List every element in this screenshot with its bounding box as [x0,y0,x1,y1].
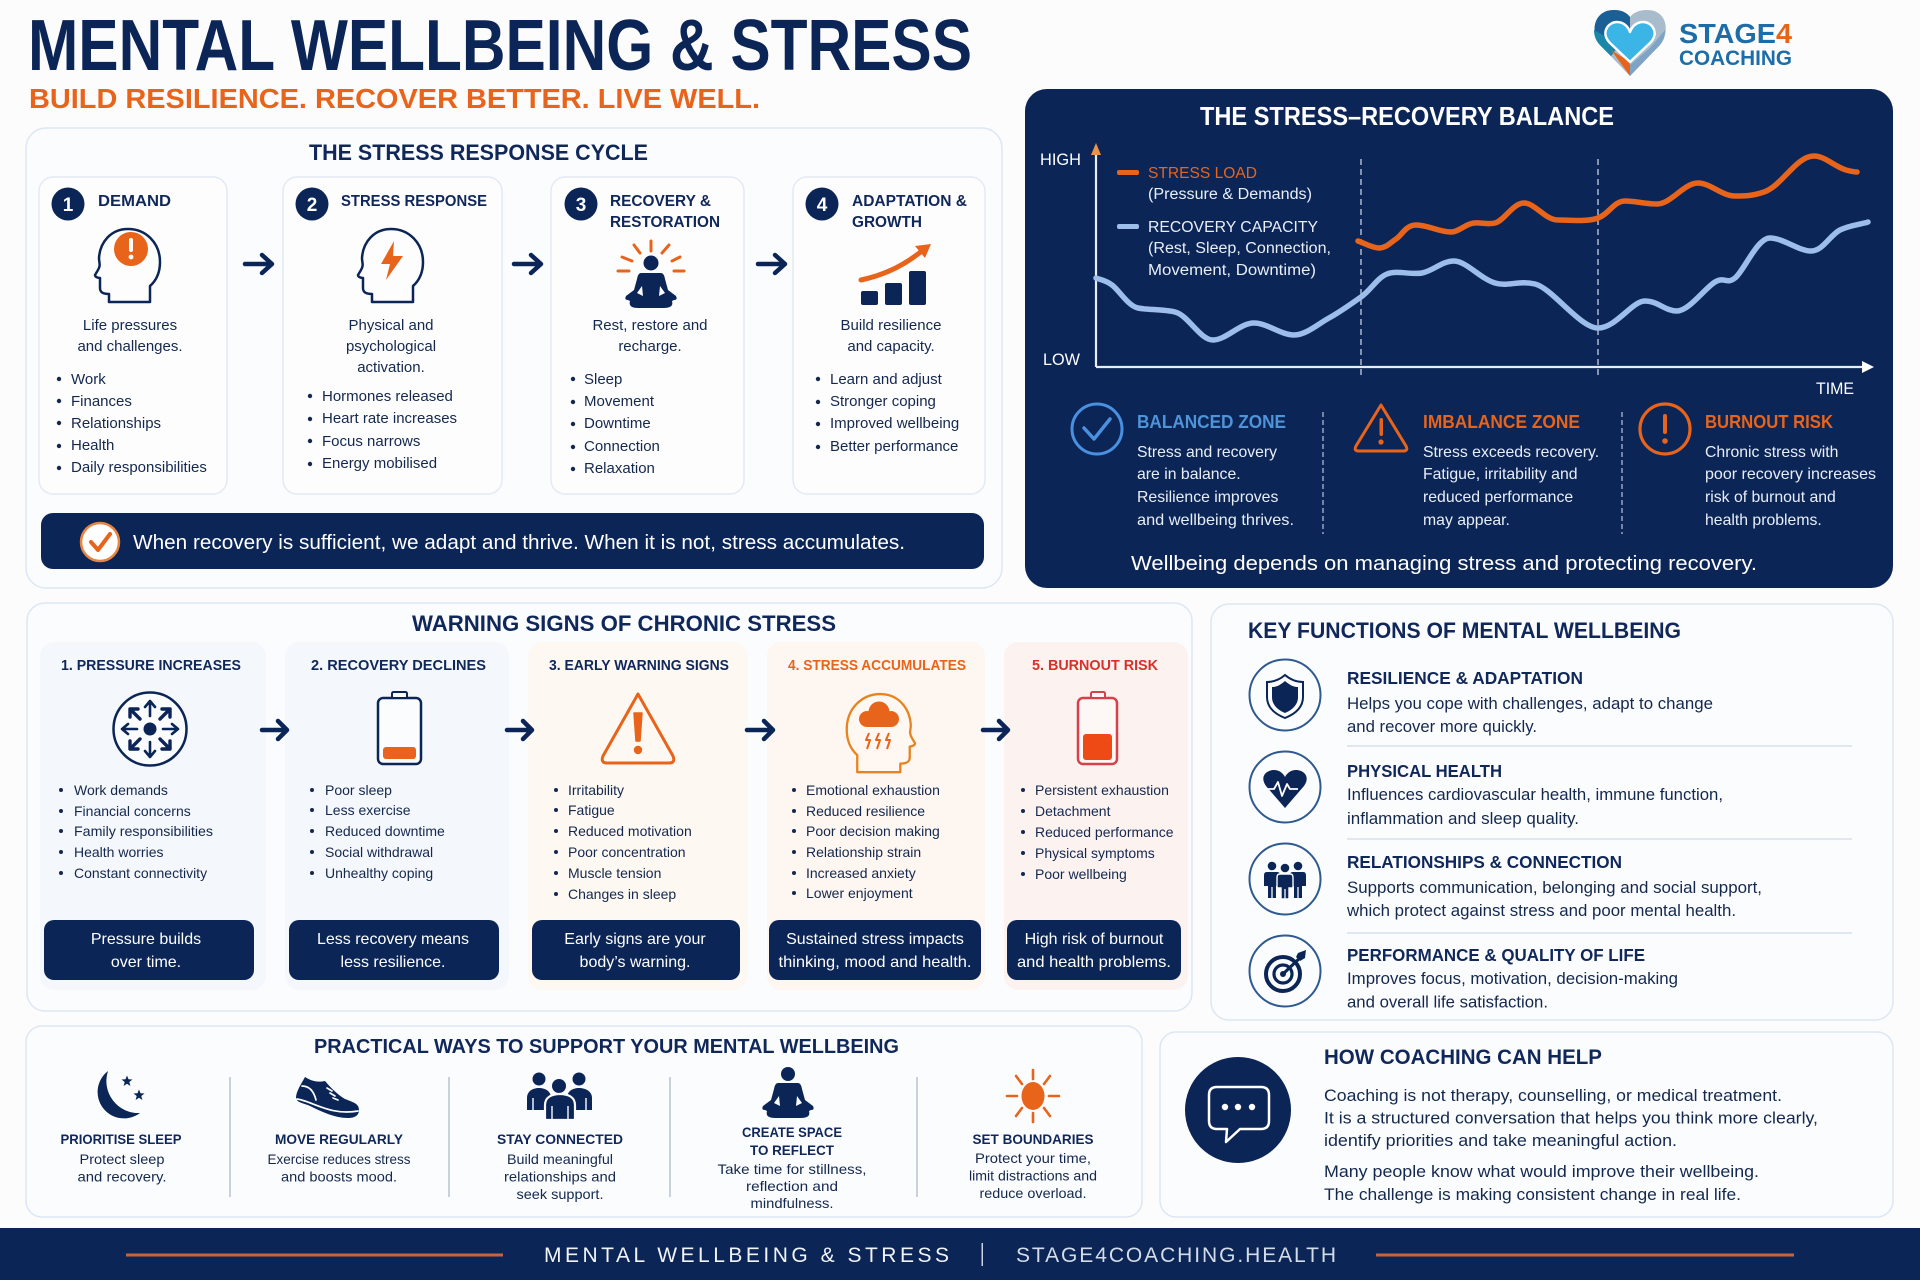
footer bar [0,1228,1920,1280]
card: burnout risk: Persistent exhaustion [1035,782,1169,798]
card: adaptation and growth: ADAPTATION & [852,193,967,210]
card: stress response: psychological [346,338,436,355]
arrow [514,255,541,273]
icon: rising bars and arrow [861,244,931,305]
card: demand: Work [71,371,106,388]
legend [1117,165,1331,279]
tip: set boundaries: SET BOUNDARIES [972,1131,1094,1147]
card: recovery declines: Less exercise [325,802,411,818]
card: pressure increases: Work demands [74,782,168,798]
card: stress accumulates: thinking, mood and health. [778,954,972,971]
zone: balanced: Stress and recovery [1137,444,1277,461]
zone: imbalance: IMBALANCE ZONE [1423,412,1580,432]
line chart: stress load and recovery capacity [1040,143,1874,398]
card: burnout risk: Physical symptoms [1035,845,1155,861]
line chart: stress load and recovery capacity: HIGH [1040,151,1081,169]
card: pressure increases: over time. [111,954,181,971]
card: early warning signs: Changes in sleep [568,886,676,902]
subtitle: BUILD RESILIENCE. RECOVER BETTER. LIVE WELL. [29,83,760,114]
card: early warning signs: 3. EARLY WARNING SIGNS [549,657,729,674]
card: recovery and restoration: Movement [584,393,655,410]
heading: key functions: KEY FUNCTIONS OF MENTAL WELLBEING [1248,618,1681,643]
card: recovery and restoration: 3 [576,195,586,216]
text block: coaching description: It is a structured conversation that helps you think more clearly, [1324,1108,1818,1128]
arrow [758,255,785,273]
card: adaptation and growth: and capacity. [847,338,935,355]
function: relationships and connection: RELATIONSHIPS & CONNECTION [1347,852,1622,872]
card: recovery declines: Reduced downtime [325,823,445,839]
line chart: stress load and recovery capacity: TIME [1816,380,1854,398]
tip: stay connected: Build meaningful [507,1151,613,1167]
icon: head with lightning bolt [358,229,423,302]
zone: burnout risk: risk of burnout and [1705,489,1836,506]
function: relationships and connection: which protect against stress and poor mental health. [1346,902,1736,920]
card: recovery and restoration: recharge. [618,338,682,355]
logo: Stage4 Coaching: STAGE4 [1679,18,1792,49]
heading: stress recovery balance: THE STRESS–RECOVERY BALANCE [1200,101,1614,131]
card: adaptation and growth: Stronger coping [830,393,936,410]
tip: stay connected: seek support. [516,1186,604,1202]
line chart: stress load and recovery capacity: LOW [1043,351,1080,369]
card: adaptation and growth: GROWTH [852,214,922,231]
icon: head with exclamation [95,229,160,302]
tip: prioritise sleep [60,1071,182,1184]
zone: balanced [1072,404,1294,529]
panel: how coaching can help [1160,1032,1893,1217]
function: performance and quality of life: Improves focus, motivation, decision-making [1347,970,1678,988]
zone: burnout risk: BURNOUT RISK [1705,412,1833,432]
title: MENTAL WELLBEING & STRESS [28,6,972,86]
card: recovery and restoration: Relaxation [584,460,655,477]
function: physical health: inflammation and sleep quality. [1347,810,1579,828]
card: demand: Finances [71,393,132,410]
card: stress accumulates: Lower enjoyment [806,885,913,901]
zone: balanced: BALANCED ZONE [1137,412,1286,432]
card: recovery and restoration: RESTORATION [610,214,720,231]
tip: set boundaries: Protect your time, [975,1150,1091,1166]
icon: pressure from all directions [114,692,186,766]
card: pressure increases: Family responsibilities [74,823,213,839]
card: adaptation and growth: Learn and adjust [830,371,943,388]
card: recovery and restoration: Sleep [584,371,622,388]
tip: set boundaries [969,1070,1097,1201]
icon: low battery [378,692,421,764]
arrow [262,721,287,739]
card: demand: Health [71,437,114,454]
card: burnout risk: Reduced performance [1035,824,1174,840]
card: recovery declines: Less recovery means [317,931,469,948]
card: stress accumulates [767,642,985,990]
text block: coaching description: Many people know what would improve their wellbeing. [1324,1162,1759,1181]
zone: burnout risk [1640,404,1876,529]
card: pressure increases: 1. PRESSURE INCREASES [61,657,241,674]
arrow [245,255,272,273]
panel: the stress response cycle [26,128,1002,588]
card: stress accumulates: Sustained stress impacts [786,931,964,948]
card: demand: Daily responsibilities [71,459,207,476]
card: recovery and restoration [551,177,744,494]
card: early warning signs: Irritability [568,782,624,798]
card: demand: Relationships [71,415,161,432]
card: pressure increases: Constant connectivity [74,865,207,881]
function: resilience and adaptation [1250,660,1713,736]
card: early warning signs: Fatigue [568,802,615,818]
card: early warning signs: Poor concentration [568,844,686,860]
callout: recovery message bar: When recovery is sufficient, we adapt and thrive. When it is not, stress accumulates. [133,532,905,554]
function: performance and quality of life: and overall life satisfaction. [1347,994,1548,1012]
card: stress accumulates: 4. STRESS ACCUMULATES [788,657,966,674]
tip: stay connected: STAY CONNECTED [497,1131,623,1147]
card: stress response: Energy mobilised [322,455,437,472]
function: relationships and connection: Supports communication, belonging and social support, [1347,879,1762,897]
function: physical health [1250,752,1723,828]
card: adaptation and growth: Better performance [830,438,958,455]
legend: RECOVERY CAPACITY [1148,219,1318,236]
footer bar: MENTAL WELLBEING & STRESS [544,1244,949,1267]
zone: imbalance: reduced performance [1423,489,1573,506]
card: burnout risk [1004,642,1188,990]
card: recovery declines: Poor sleep [325,782,392,798]
zone: balanced: are in balance. [1137,466,1241,483]
card: demand: 1 [63,195,74,216]
icon: warning triangle [602,694,674,763]
tip: set boundaries: limit distractions and [969,1168,1097,1184]
card: stress response: activation. [357,359,425,376]
card: pressure increases: Financial concerns [74,803,191,819]
card: demand: and challenges. [77,338,183,355]
legend: (Rest, Sleep, Connection, [1148,240,1331,257]
footer bar: STAGE4COACHING.HEALTH [1016,1244,1336,1267]
card: recovery and restoration: Rest, restore and [592,317,708,334]
card: adaptation and growth [793,177,985,494]
icon: draining red battery [1078,692,1117,764]
text block: coaching description: The challenge is making consistent change in real life. [1324,1185,1741,1204]
text block: coaching description: identify priorities and take meaningful action. [1324,1131,1677,1150]
card: early warning signs: body’s warning. [580,954,690,971]
tip: create space to reflect: mindfulness. [750,1195,834,1211]
card: pressure increases [40,642,266,990]
tip: prioritise sleep: and recovery. [78,1168,166,1184]
function: physical health: Influences cardiovascular health, immune function, [1347,786,1723,804]
card: adaptation and growth: Build resilience [841,317,941,334]
heading: stress response cycle: THE STRESS RESPONSE CYCLE [309,140,648,165]
card: stress response: Physical and [348,317,434,334]
card: recovery and restoration: Downtime [584,415,651,432]
card: recovery declines [285,642,509,990]
zone: burnout risk: Chronic stress with [1705,444,1838,461]
card: recovery declines: less resilience. [341,954,445,971]
zone: imbalance: Fatigue, irritability and [1423,466,1578,483]
function: relationships and connection [1250,844,1762,920]
arrow [983,721,1008,739]
tip: stay connected: relationships and [504,1168,616,1184]
card: demand: DEMAND [98,193,171,210]
panel: the stress-recovery balance [1025,89,1893,588]
panel: practical ways to support your mental wellbeing [26,1026,1142,1217]
card: stress accumulates: Reduced resilience [806,803,925,819]
heading: how coaching can help: HOW COACHING CAN HELP [1324,1046,1602,1069]
icon: meditating person with rays [618,241,684,308]
tip: prioritise sleep: Protect sleep [80,1151,165,1167]
tip: create space to reflect: reflection and [746,1178,838,1194]
panel: key functions of mental wellbeing [1211,604,1893,1020]
card: stress accumulates: Increased anxiety [806,865,916,881]
card: stress response: 2 [307,195,317,216]
function: physical health: PHYSICAL HEALTH [1347,761,1502,781]
card: stress accumulates: Relationship strain [806,844,921,860]
tip: move regularly [268,1077,410,1184]
card: burnout risk: 5. BURNOUT RISK [1032,657,1158,674]
zone: imbalance: may appear. [1423,512,1510,529]
function: performance and quality of life [1250,936,1678,1012]
function: resilience and adaptation: Helps you cope with challenges, adapt to change [1347,695,1713,713]
card: stress response: Hormones released [322,388,453,405]
card: stress response: Heart rate increases [322,410,457,427]
function: resilience and adaptation: and recover more quickly. [1347,718,1537,736]
tip: stay connected [497,1072,623,1202]
card: stress accumulates: Poor decision making [806,823,940,839]
card: recovery and restoration: Connection [584,438,660,455]
card: burnout risk: Poor wellbeing [1035,866,1127,882]
arrow [507,721,532,739]
card: pressure increases: Pressure builds [91,931,201,948]
card: recovery declines: Social withdrawal [325,844,433,860]
card: pressure increases: Health worries [74,844,163,860]
zone: balanced: Resilience improves [1137,489,1278,506]
tip: create space to reflect: Take time for stillness, [718,1161,866,1177]
card: demand: Life pressures [83,317,177,334]
tip: move regularly: Exercise reduces stress [268,1151,410,1167]
legend: STRESS LOAD [1148,165,1257,182]
card: early warning signs: Reduced motivation [568,823,692,839]
tip: move regularly: MOVE REGULARLY [275,1131,404,1147]
card: early warning signs [528,642,748,990]
tip: prioritise sleep: PRIORITISE SLEEP [60,1131,182,1147]
card: stress accumulates: Emotional exhaustion [806,782,940,798]
heading: practical ways: PRACTICAL WAYS TO SUPPORT YOUR MENTAL WELLBEING [314,1036,899,1058]
zone: burnout risk: poor recovery increases [1705,466,1876,483]
card: burnout risk: High risk of burnout [1025,931,1164,948]
card: adaptation and growth: 4 [817,195,828,216]
logo: Stage4 Coaching [1594,10,1792,76]
tip: create space to reflect: TO REFLECT [750,1142,834,1158]
zone: imbalance [1355,405,1599,529]
text block: coaching description: Coaching is not therapy, counselling, or medical treatment. [1324,1086,1782,1105]
card: early warning signs: Early signs are your [564,931,706,948]
legend: Movement, Downtime) [1148,262,1316,279]
tip: set boundaries: reduce overload. [980,1185,1086,1201]
card: demand [39,177,227,494]
zone: balanced: and wellbeing thrives. [1137,512,1294,529]
zone: burnout risk: health problems. [1705,512,1822,529]
tip: create space to reflect [718,1067,866,1211]
tip: move regularly: and boosts mood. [281,1168,397,1184]
zone: imbalance: Stress exceeds recovery. [1423,444,1599,461]
card: burnout risk: and health problems. [1017,954,1171,971]
function: performance and quality of life: PERFORMANCE & QUALITY OF LIFE [1347,945,1645,965]
card: stress response: STRESS RESPONSE [341,193,487,210]
card: stress response [283,177,502,494]
text block: coaching description [1324,1086,1818,1204]
function: resilience and adaptation: RESILIENCE & ADAPTATION [1347,668,1583,688]
panel: warning signs of chronic stress [27,603,1192,1011]
callout: recovery message bar [41,513,984,569]
card: stress response: Focus narrows [322,433,420,450]
closing statement: Wellbeing depends on managing stress and protecting recovery. [1131,552,1757,575]
card: recovery declines: Unhealthy coping [325,865,433,881]
card: recovery and restoration: RECOVERY & [610,193,711,210]
icon: head with storm cloud [847,694,915,772]
tip: create space to reflect: CREATE SPACE [742,1124,842,1140]
icon: speech bubble [1185,1057,1291,1163]
card: burnout risk: Detachment [1035,803,1111,819]
logo: Stage4 Coaching: COACHING [1679,47,1792,70]
arrow [747,721,773,739]
legend: (Pressure & Demands) [1148,186,1312,203]
card: adaptation and growth: Improved wellbeing [830,415,959,432]
heading: warning signs: WARNING SIGNS OF CHRONIC STRESS [412,611,836,636]
card: recovery declines: 2. RECOVERY DECLINES [311,657,486,674]
card: early warning signs: Muscle tension [568,865,661,881]
